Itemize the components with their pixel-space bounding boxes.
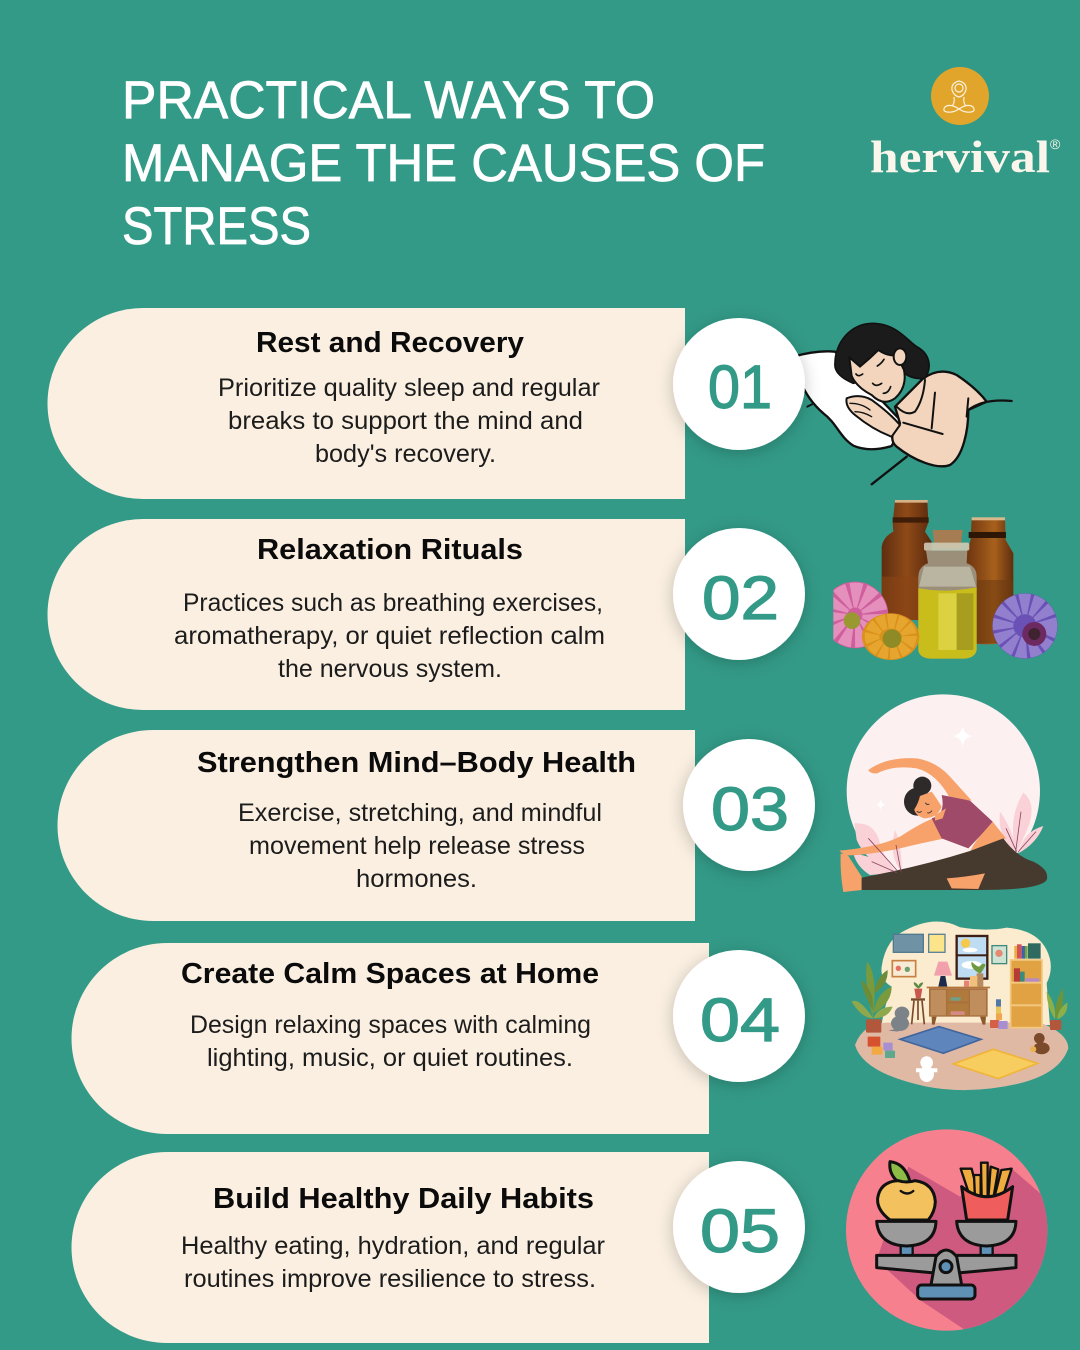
description: routines improve resilience to stress. [184, 1265, 596, 1293]
panel 03: strengthen mind-body health [58, 730, 815, 921]
number badge 04 [673, 950, 805, 1082]
icon: meditating figure badge [931, 67, 989, 125]
description: aromatherapy, or quiet reflection calm [174, 622, 605, 650]
illustration: essential oil bottles and flowers [822, 500, 1058, 660]
number badge 05 [673, 1161, 805, 1293]
description [218, 374, 600, 468]
number badge 04: 04 [700, 986, 780, 1054]
number badge 02 [673, 528, 805, 660]
number badge 05: 05 [700, 1197, 780, 1265]
description: Practices such as breathing exercises, [183, 589, 603, 617]
description: hormones. [356, 865, 477, 893]
panel 05: build healthy daily habits [72, 1152, 805, 1343]
title [122, 71, 765, 256]
illustration: sleeping woman [793, 323, 1012, 484]
description [190, 1011, 591, 1072]
heading: Strengthen Mind–Body Health [197, 747, 636, 779]
panel 02: relaxation rituals [47, 519, 805, 710]
description: Exercise, stretching, and mindful [238, 799, 602, 827]
description: Prioritize quality sleep and regular [218, 374, 600, 402]
registered mark: ® [1050, 136, 1061, 152]
number badge 02: 02 [702, 564, 779, 632]
heading: Build Healthy Daily Habits [213, 1183, 594, 1215]
number badge 01: 01 [708, 353, 772, 421]
description [238, 799, 602, 893]
wordmark: hervival [870, 131, 1050, 182]
description: body's recovery. [315, 440, 496, 468]
title: MANAGE THE CAUSES OF [122, 134, 765, 193]
heading: Relaxation Rituals [257, 534, 523, 566]
illustration: woman stretching [839, 694, 1047, 892]
title: STRESS [122, 197, 311, 256]
description: Healthy eating, hydration, and regular [181, 1232, 605, 1260]
heading: Rest and Recovery [256, 327, 524, 359]
illustration: balance scale with apple and fries [846, 1129, 1048, 1331]
panel 04: create calm spaces at home [72, 943, 805, 1134]
description: breaks to support the mind and [228, 407, 583, 435]
number badge 01 [673, 318, 805, 450]
description: movement help release stress [249, 832, 585, 860]
description: Design relaxing spaces with calming [190, 1011, 591, 1039]
heading: Create Calm Spaces at Home [181, 958, 599, 990]
description [181, 1232, 605, 1293]
number badge 03 [683, 739, 815, 871]
illustration: calm living room [852, 922, 1068, 1090]
description [174, 589, 605, 683]
description: lighting, music, or quiet routines. [207, 1044, 573, 1072]
description: the nervous system. [278, 655, 502, 683]
logo: hervival [870, 67, 1061, 182]
title: PRACTICAL WAYS TO [122, 71, 655, 130]
number badge 03: 03 [711, 775, 789, 843]
panel 01: rest and recovery [47, 308, 805, 499]
